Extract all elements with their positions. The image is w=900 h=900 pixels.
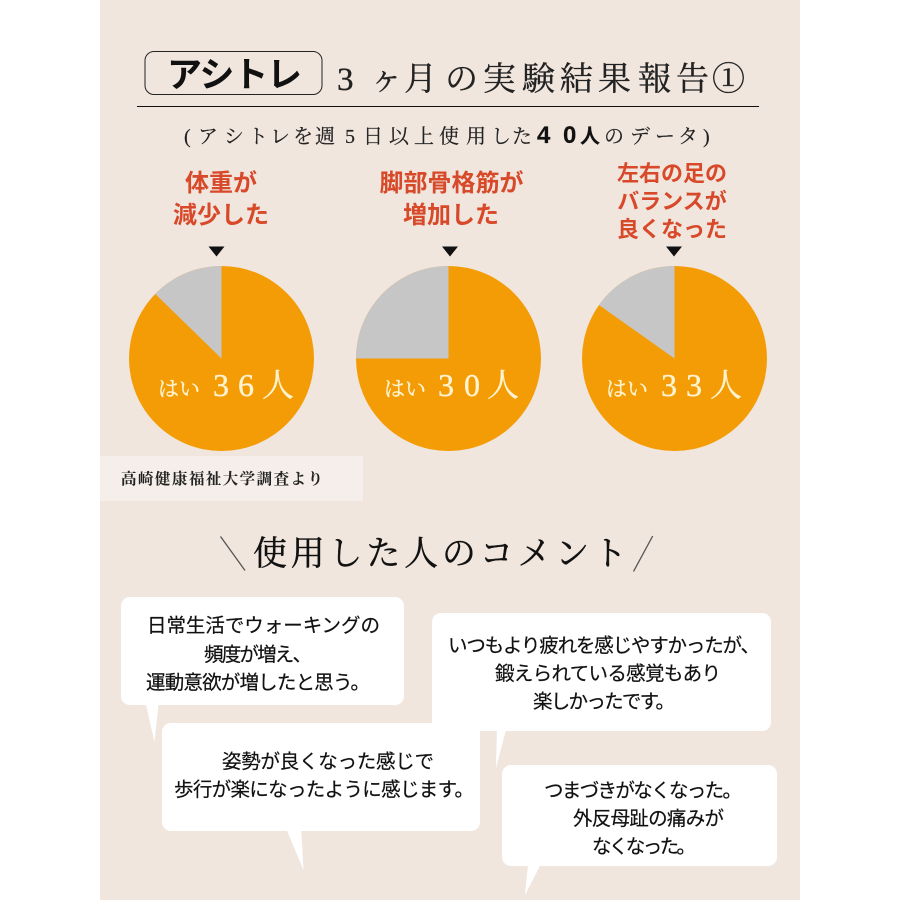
pie chart: 36 of 40: 36人 [213, 367, 294, 403]
speech bubble: tripping: つまづきがなくなった。 [544, 780, 742, 802]
title [145, 52, 745, 98]
heading: balance: 左右の足の [617, 161, 727, 186]
chart column: weight [129, 169, 314, 451]
title badge [145, 52, 322, 95]
chart column: balance [582, 161, 767, 451]
speech bubble: tripping: 外反母趾の痛みが [573, 808, 724, 830]
subtitle: 40 [537, 122, 576, 149]
speech bubble: walking: 運動意欲が増したと思う。 [146, 672, 370, 694]
speech bubble: tripping: なくなった。 [592, 836, 696, 858]
pie chart: 36 of 40: はい [158, 377, 200, 401]
arrow marker [442, 246, 458, 256]
heading: weight: 減少した [173, 202, 269, 229]
title text: 3ヶ月の実験結果報告① [337, 61, 745, 98]
speech bubble: tired but fun: 鍛えられている感覚もあり [495, 663, 721, 685]
speech bubble: tired but fun: 楽しかったです。 [533, 691, 675, 713]
heading: leg muscle: 脚部骨格筋が [380, 169, 524, 197]
pie chart: 33 of 40: 33人 [661, 367, 742, 403]
speech bubble: walking [121, 597, 404, 742]
speech bubble: posture: 姿勢が良くなった感じで [222, 751, 434, 773]
subtitle: (アシトレを週5日以上使用した [184, 125, 532, 148]
speech bubble: posture [162, 723, 480, 870]
pie chart: 30 of 40 [356, 266, 541, 451]
speech bubble: walking: 頻度が増え、 [204, 644, 312, 666]
pie chart: 30 of 40: はい [384, 377, 426, 401]
background panel [100, 0, 800, 900]
arrow marker [666, 246, 682, 256]
comments heading: 使用した人のコメント [253, 535, 627, 573]
subtitle: 人 [580, 126, 600, 148]
heading: weight: 体重が [185, 169, 257, 197]
pie chart: 33 of 40: はい [606, 377, 648, 401]
speech bubble: tired but fun: いつもより疲れを感じやすかったが、 [448, 635, 760, 657]
pie chart: 30 of 40: 30人 [438, 367, 519, 403]
pie chart: 36 of 40 [129, 266, 314, 451]
heading: balance: バランスが [617, 189, 727, 214]
arrow marker [208, 246, 224, 256]
speech bubble: walking: 日常生活でウォーキングの [147, 615, 380, 637]
subtitle: のデータ) [604, 125, 710, 148]
speech bubble: tripping [502, 765, 777, 895]
title badge: アシトレ [167, 56, 302, 95]
heading: leg muscle: 増加した [403, 202, 499, 229]
speech bubble: posture: 歩行が楽になったように感じます。 [174, 779, 474, 801]
source note [100, 456, 363, 501]
pie chart: 33 of 40 [582, 266, 767, 451]
chart column: leg muscle [356, 169, 541, 451]
speech bubble: tired but fun [432, 613, 771, 768]
source note: 高崎健康福祉大学調査より [121, 469, 323, 488]
heading: balance: 良くなった [617, 217, 727, 242]
